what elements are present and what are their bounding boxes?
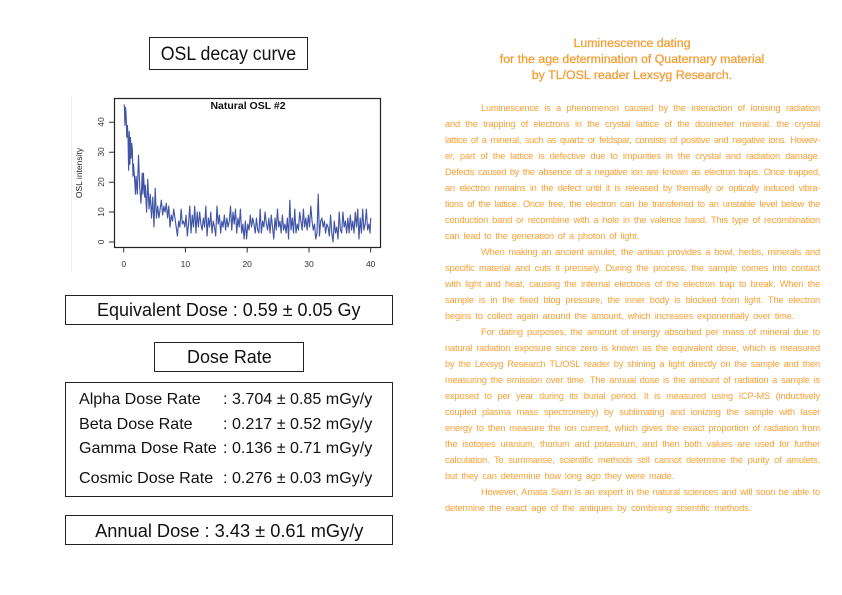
beta dose rate: : 0.217 ± 0.52 mGy/y — [223, 415, 372, 433]
x axis ticks and numbers: 40 — [366, 259, 376, 269]
alpha dose rate: : 3.704 ± 0.85 mGy/y — [223, 390, 372, 408]
text block: paragraph 4: However, Amata Siam is an expert in the natural sciences and will soon be able to — [481, 487, 820, 497]
text block: paragraph 3: For dating purposes, the amount of energy absorbed per mass of mineral due to — [481, 327, 820, 337]
article title — [500, 36, 764, 82]
article title: for the age determination of Quaternary material — [500, 52, 764, 66]
text block: paragraph 1: Defects caused by the absence of a negative ion are known as electron traps. Once trapped, — [445, 167, 820, 177]
text block: paragraph 3: by the Lexsyg Research TL/OSL reader by shining a light directly on the sample and then — [445, 359, 820, 369]
y axis ticks and numbers: 10 — [96, 207, 106, 217]
text block: paragraph 1: and the trapping of electrons in the crystal lattice of the dosimeter mineral. the crystal — [445, 119, 820, 129]
text block: paragraph 2: with light and heat, causing the internal electrons of the electron trap to break. When the — [445, 279, 820, 289]
alpha dose rate: Alpha Dose Rate — [79, 390, 201, 408]
text block: paragraph 4: determine the exact age of the antiques by combining scientific methods. — [445, 503, 751, 513]
text block: paragraph 1: tions of the lattice. Once free, the electron can be transferred to an unstable level below the — [445, 199, 820, 209]
article title: by TL/OSL reader Lexsyg Research. — [532, 68, 732, 82]
gamma dose rate: : 0.136 ± 0.71 mGy/y — [223, 439, 372, 457]
decay curve line — [124, 104, 371, 242]
x axis ticks and numbers: 30 — [304, 259, 314, 269]
text block: paragraph 3 — [445, 327, 820, 481]
heading: dose rate: Dose Rate — [187, 346, 271, 367]
article title: Luminescence dating — [573, 36, 691, 50]
text block: paragraph 3: natural radiation exposure since zero is known as the equivalent dose, which is measured — [445, 343, 820, 353]
text block: paragraph 2: When making an ancient amulet, the artisan provides a bowl, herbs, minerals and — [481, 247, 820, 257]
y axis label: OSL intensity — [74, 147, 84, 198]
plot frame — [114, 98, 380, 248]
text block: paragraph 1: er, part of the lattice is defective due to impurities in the crystal and radiation damage. — [445, 151, 820, 161]
text block: paragraph 1: conduction band or recombine with a hole in the valence band. This type of recombination — [445, 215, 820, 225]
y axis ticks and numbers: 0 — [96, 239, 106, 244]
gamma dose rate — [79, 439, 372, 457]
cosmic dose rate — [79, 469, 372, 487]
text block: paragraph 2: sample is in the fixed blog pressure, the inner body is blocked from light. The electron — [445, 295, 820, 305]
result: equivalent dose — [65, 295, 393, 325]
y axis ticks and numbers: 30 — [96, 147, 106, 157]
text block: paragraph 2: specific material and cuts it precisely. During the process, the sample comes into contact — [445, 263, 820, 273]
cosmic dose rate: : 0.276 ± 0.03 mGy/y — [223, 469, 372, 487]
text block: paragraph 2 — [445, 247, 820, 321]
text block: paragraph 3: exposed to per year during its burial period. It is measured using ICP-MS (inductively — [445, 391, 820, 401]
text block: paragraph 3: the isotopes uranium, thorium and potassium, and then both values are used for further — [445, 439, 820, 449]
x axis ticks and numbers: 10 — [181, 259, 190, 269]
text block: paragraph 1: lattice of a mineral, such as quartz or feldspar, consists of positive and negative ions. Howev- — [445, 135, 820, 145]
gamma dose rate: Gamma Dose Rate — [79, 439, 217, 457]
text block: paragraph 3: calculation. To summarise, scientific methods still cannot determine the purity of amulets, — [445, 455, 820, 465]
text block: paragraph 1: Luminescence is a phenomenon caused by the interaction of ionising radiation — [481, 103, 820, 113]
text block: paragraph 3: coupled plasma mass spectrometry) by sublimating and ionizing the sample with laser — [445, 407, 820, 417]
y axis ticks and numbers — [96, 117, 114, 244]
heading: OSL decay curve: OSL decay curve — [161, 43, 296, 65]
x axis ticks and numbers — [121, 248, 376, 269]
heading: dose rate — [154, 342, 304, 372]
result: equivalent dose: Equivalent Dose : 0.59 ± 0.05 Gy — [97, 299, 361, 320]
x axis ticks and numbers: 20 — [242, 259, 252, 269]
heading: OSL decay curve — [149, 37, 308, 70]
text block: paragraph 2: begins to collect again around the amount, which increases exponentially over time. — [445, 311, 794, 321]
text block: paragraph 1: an electron remains in the defect until it is released by thermally or optically induced vibra- — [445, 183, 820, 193]
beta dose rate — [79, 415, 372, 433]
text block: paragraph 3: measuring the emission over time. The annual dose is the amount of radiation a sample is — [445, 375, 820, 385]
text block: paragraph 3: energy to then measure the ion current, which gives the exact proportion of radiation from — [445, 423, 820, 433]
result: annual dose: Annual Dose : 3.43 ± 0.61 mGy/y — [95, 520, 363, 541]
x axis ticks and numbers: 0 — [121, 259, 126, 269]
beta dose rate: Beta Dose Rate — [79, 415, 193, 433]
y axis ticks and numbers: 40 — [96, 117, 106, 127]
result: annual dose — [65, 515, 393, 545]
y axis ticks and numbers: 20 — [96, 177, 106, 187]
text block: paragraph 3: but they can determine how long ago they were made. — [445, 471, 674, 481]
text block: paragraph 4 — [445, 487, 820, 513]
text block: paragraph 1: can lead to the generation of a photon of light. — [445, 231, 639, 241]
chart title: Natural OSL #2 — [210, 100, 286, 112]
panel: dose rate values — [65, 382, 393, 497]
chart: Natural OSL decay line chart — [71, 96, 382, 272]
text block: paragraph 1 — [445, 103, 820, 241]
cosmic dose rate: Cosmic Dose Rate — [79, 469, 213, 487]
alpha dose rate — [79, 390, 372, 408]
